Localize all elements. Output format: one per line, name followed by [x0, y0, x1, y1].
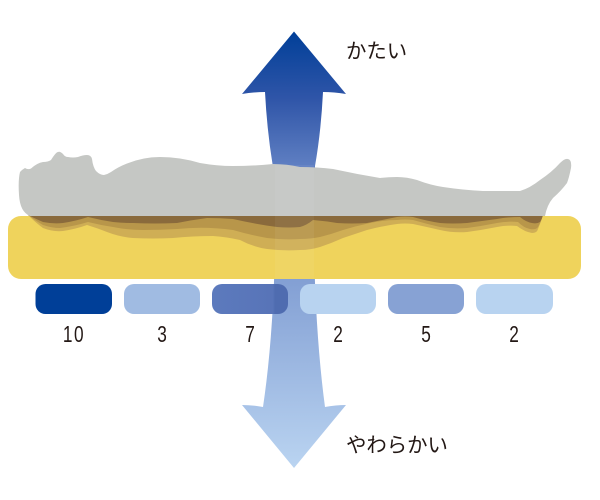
body impression: outer layer: [28, 215, 543, 250]
label: firm: かたい: [346, 41, 407, 63]
arrow: downward, softer: [242, 250, 346, 468]
value 7: 7: [245, 323, 255, 348]
pad 1: [36, 284, 112, 314]
pad 6: [476, 284, 553, 314]
label: soft: やわらかい: [346, 435, 448, 457]
firmness values: [63, 323, 519, 348]
value 2: 2: [509, 323, 519, 348]
value 10: 10: [63, 323, 85, 348]
value 5: 5: [421, 323, 431, 348]
value 3: 3: [157, 323, 167, 348]
arrow: upward, firmer: [242, 32, 346, 175]
reclining human silhouette: [19, 152, 571, 216]
mattress: [8, 216, 581, 279]
body impression: inner layer: [28, 215, 543, 228]
value 2: 2: [333, 323, 343, 348]
pad 5: [388, 284, 464, 314]
firmness pads: [36, 284, 553, 314]
pad 3: [212, 284, 288, 314]
pad 2: [124, 284, 200, 314]
body impression: middle layer: [28, 215, 543, 239]
pad 4: [300, 284, 376, 314]
